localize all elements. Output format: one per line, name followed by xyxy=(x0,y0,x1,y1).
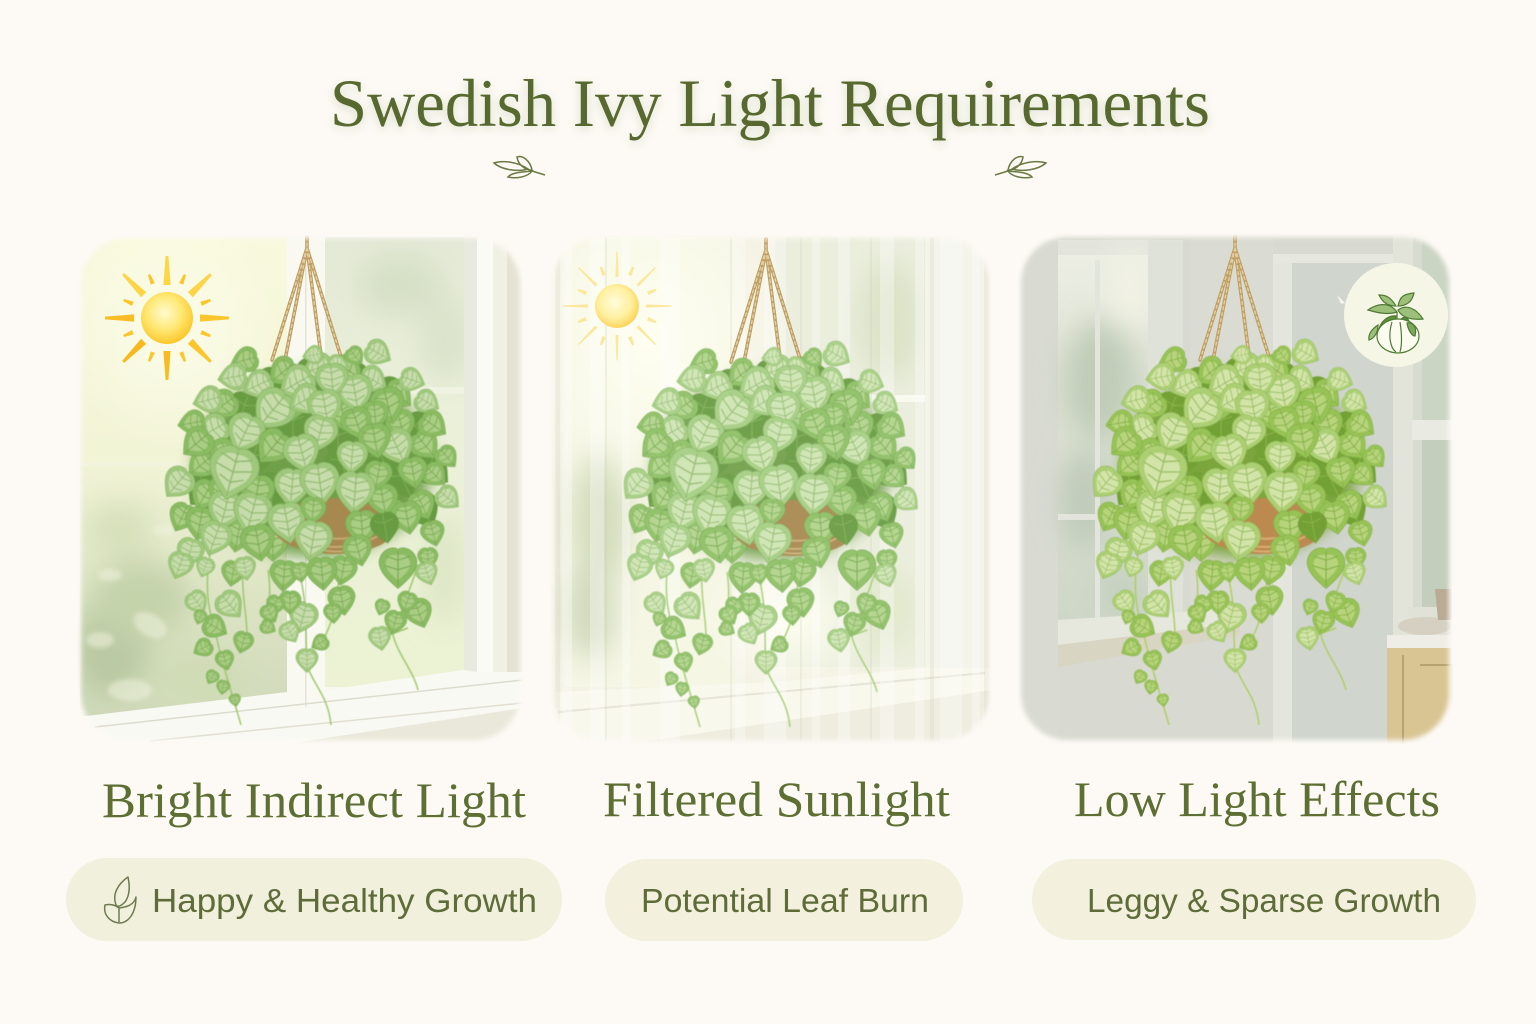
plant: hanging swedish ivy, low light xyxy=(1083,335,1394,725)
icon: circular plant badge xyxy=(1337,263,1448,367)
panel: filtered sunlight xyxy=(552,237,990,742)
ropes: bright panel xyxy=(272,237,342,363)
ropes: filtered panel xyxy=(731,239,801,365)
window scene xyxy=(60,210,523,745)
pill text: Happy & Healthy Growth xyxy=(152,882,537,919)
icon: bright sun xyxy=(105,256,229,380)
panel: bright indirect light xyxy=(60,210,523,745)
panel: low light effects xyxy=(1018,234,1452,744)
plant: hanging swedish ivy, filtered xyxy=(614,337,925,727)
heading: filtered sunlight: Filtered Sunlight xyxy=(603,771,950,827)
heading: bright indirect light: Bright Indirect Light xyxy=(102,772,526,828)
pill text: Leggy & Sparse Growth xyxy=(1087,882,1441,919)
heading: low light effects: Low Light Effects xyxy=(1074,771,1440,827)
pill text: Potential Leaf Burn xyxy=(641,882,929,919)
title: Swedish Ivy Light Requirements xyxy=(330,65,1210,141)
dim room scene xyxy=(1018,234,1452,744)
icon: soft filtered sun xyxy=(562,251,672,361)
title: Swedish Ivy Light Requirements xyxy=(330,68,1210,144)
pill: leggy and sparse growth xyxy=(1032,859,1476,940)
ropes: low light panel xyxy=(1200,237,1270,363)
window scene with sheer curtains xyxy=(552,237,990,742)
pill: happy and healthy growth xyxy=(66,858,562,941)
icon: left leaf sprig xyxy=(494,157,545,178)
plant: hanging swedish ivy, bright xyxy=(155,335,466,725)
pill: potential leaf burn xyxy=(605,859,963,941)
icon: leaf sprout outline xyxy=(105,877,136,923)
icon: right leaf sprig xyxy=(995,157,1046,178)
